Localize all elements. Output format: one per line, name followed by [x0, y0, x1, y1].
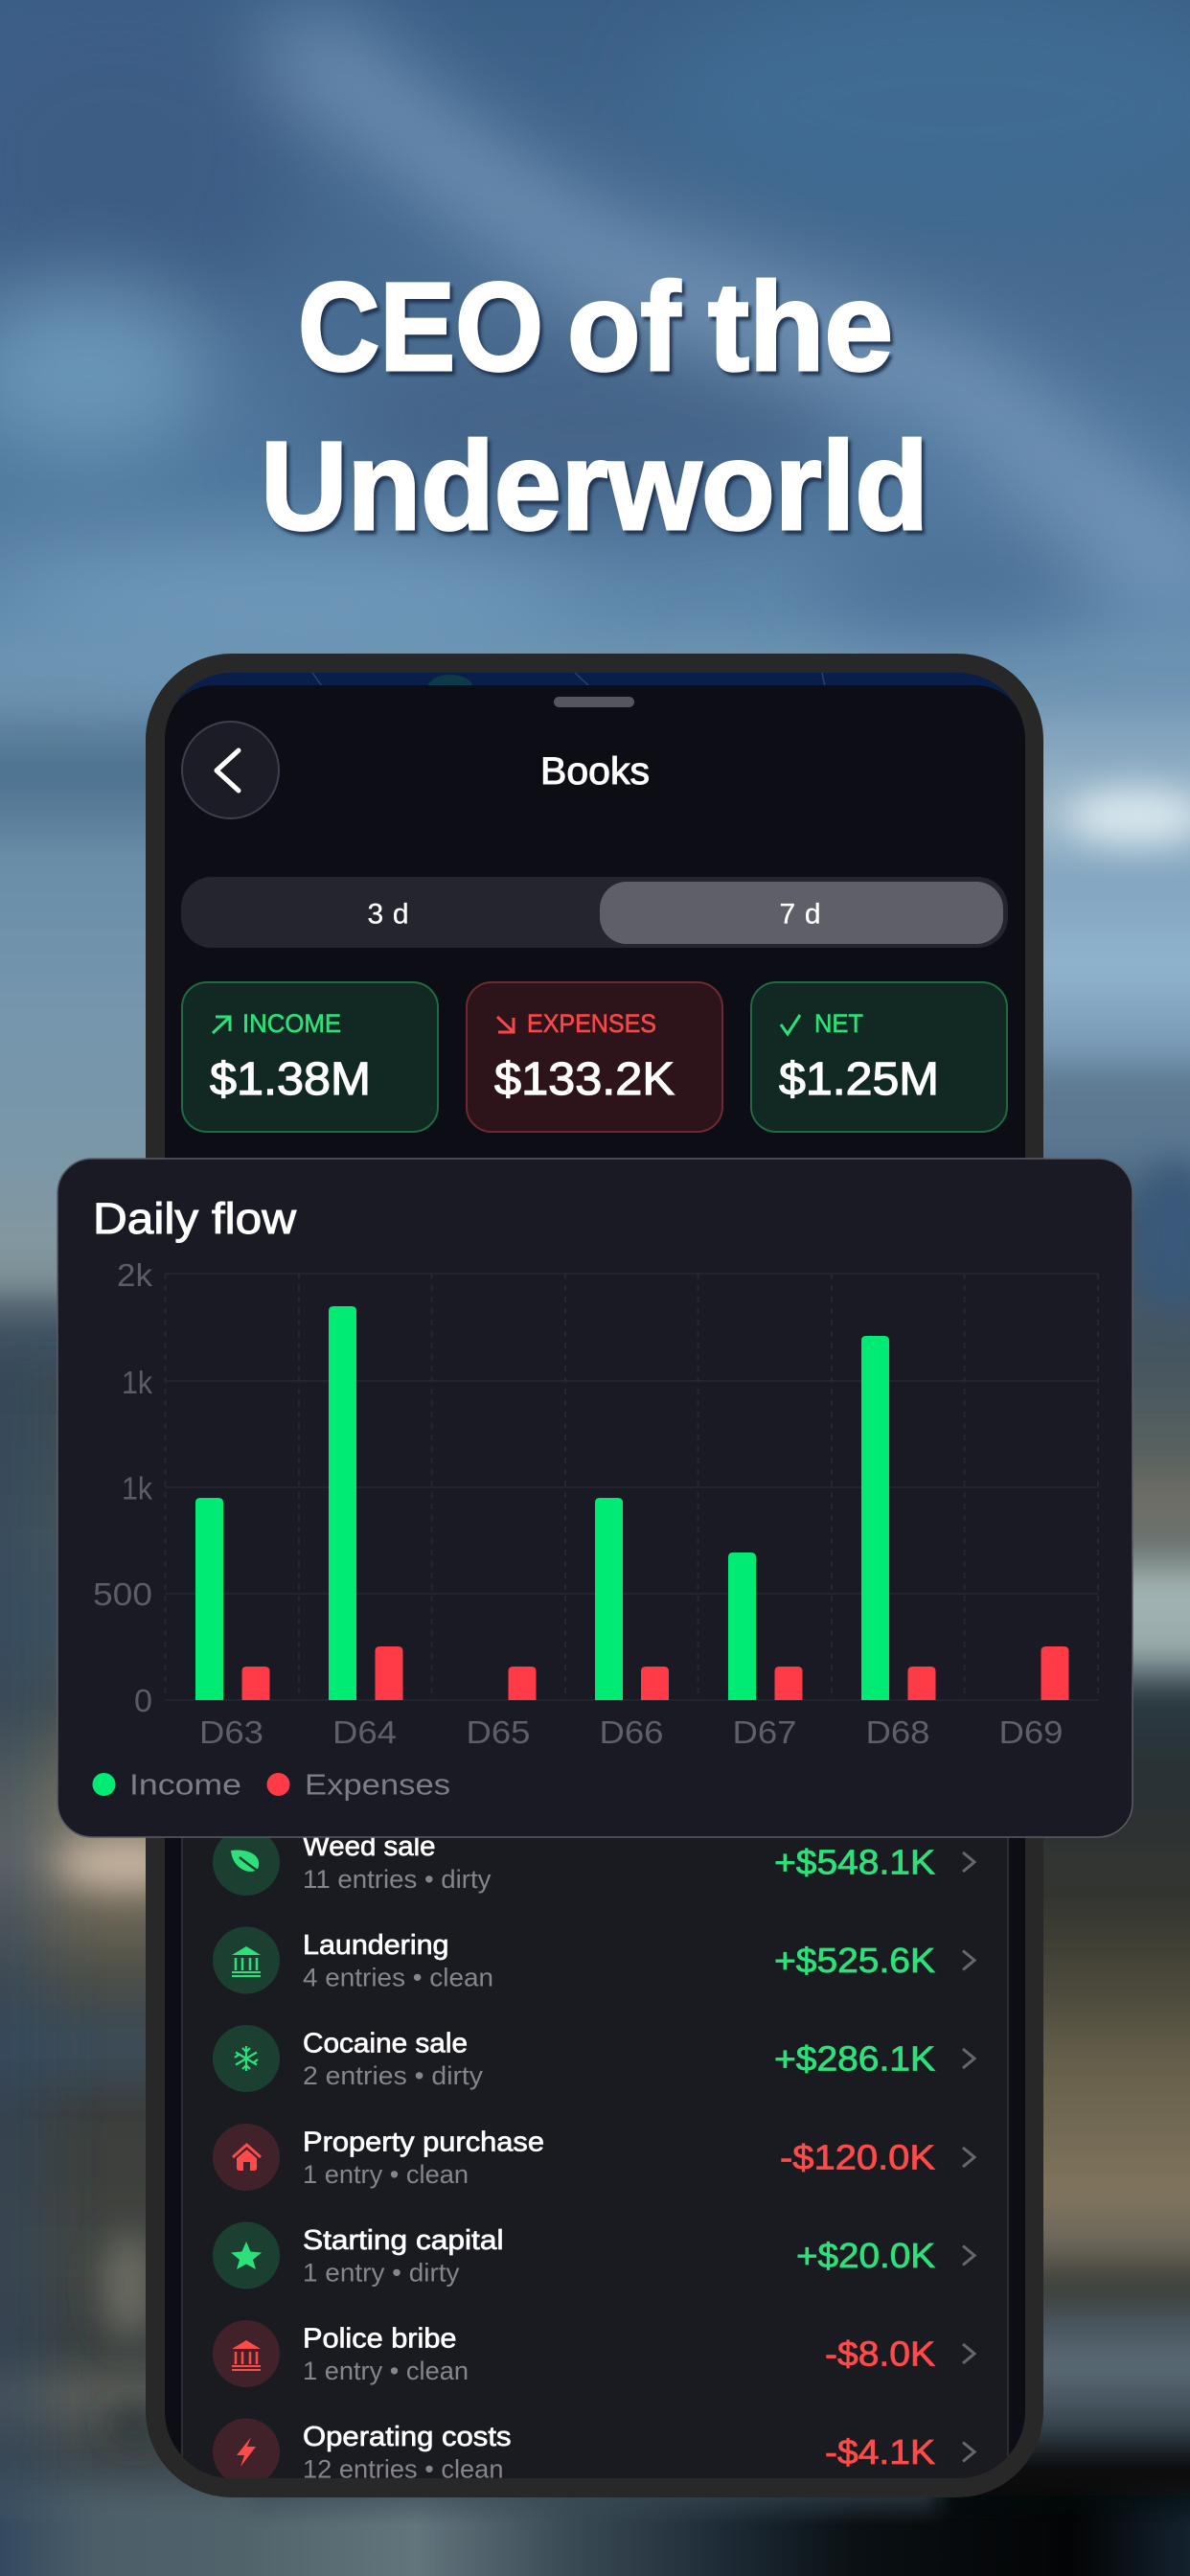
card heading: Daily flow	[93, 1194, 297, 1243]
row: starting capital: +$20.0K	[796, 2236, 935, 2275]
income bars	[195, 1306, 889, 1700]
row: cocaine sale	[213, 2025, 974, 2092]
stat card: income	[182, 982, 438, 1132]
title: of	[567, 256, 680, 397]
stat card: income: $1.38M	[210, 1054, 371, 1105]
row: property purchase: 1 entry • clean	[303, 2160, 469, 2189]
row: weed sale: 11 entries • dirty	[303, 1865, 492, 1894]
range segmented control: 3 d	[368, 899, 408, 930]
row: starting capital: 1 entry • dirty	[303, 2258, 460, 2287]
sheet heading: Books	[540, 750, 650, 793]
phone frame	[146, 654, 1043, 2497]
row: laundering: Laundering	[303, 1930, 448, 1961]
row: cocaine sale: +$286.1K	[774, 2039, 935, 2078]
x axis labels: D66	[600, 1714, 663, 1750]
sheet handle	[554, 697, 634, 707]
row: starting capital	[213, 2221, 974, 2288]
map sliver behind sheet	[165, 673, 1025, 711]
legend: Expenses	[305, 1767, 450, 1802]
x axis labels: D67	[732, 1714, 797, 1750]
row: operating costs: 12 entries • clean	[303, 2455, 504, 2484]
row: weed sale	[213, 1838, 977, 1896]
row: laundering: 4 entries • clean	[303, 1963, 493, 1991]
range segmented control	[181, 877, 1008, 948]
row: laundering: +$525.6K	[774, 1941, 935, 1980]
row: police bribe	[213, 2320, 974, 2387]
y axis labels: 0	[134, 1683, 152, 1718]
panel: daily flow chart card	[57, 1159, 1133, 1837]
title: CEO	[298, 256, 543, 397]
row: weed sale: Weed sale	[303, 1831, 435, 1862]
y axis labels: 500	[93, 1576, 152, 1612]
y axis labels: 2k	[117, 1257, 153, 1293]
row: weed sale: +$548.1K	[774, 1842, 935, 1882]
row: operating costs	[213, 2419, 977, 2478]
row: cocaine sale: Cocaine sale	[303, 2028, 468, 2058]
row: police bribe: Police bribe	[303, 2323, 456, 2354]
title: Underworld	[261, 415, 928, 556]
row: property purchase: Property purchase	[303, 2128, 544, 2158]
x axis labels: D69	[998, 1714, 1064, 1750]
row: property purchase: -$120.0K	[780, 2137, 935, 2177]
stat card: expenses: $133.2K	[494, 1054, 675, 1105]
x axis labels: D65	[466, 1714, 531, 1750]
row: operating costs: Operating costs	[303, 2422, 512, 2452]
phone screen	[165, 673, 1025, 2576]
stat card: net: NET	[814, 1009, 863, 1038]
bottom sheet	[165, 685, 1025, 2506]
row: cocaine sale: 2 entries • dirty	[303, 2061, 484, 2090]
stat card: expenses	[467, 982, 722, 1132]
row: operating costs: -$4.1K	[825, 2432, 935, 2472]
x axis labels: D63	[199, 1714, 263, 1750]
stat card: net: $1.25M	[779, 1054, 939, 1105]
stat card: income: INCOME	[242, 1009, 341, 1038]
row: police bribe: 1 entry • clean	[303, 2357, 469, 2385]
row: laundering	[213, 1926, 974, 1993]
title: the	[708, 256, 893, 397]
row: police bribe: -$8.0K	[825, 2334, 935, 2373]
legend: Income	[129, 1767, 241, 1802]
y axis labels	[93, 1257, 153, 1718]
stat card: net	[751, 982, 1007, 1132]
x axis labels: D64	[332, 1714, 397, 1750]
back button	[182, 722, 279, 818]
expense bars	[241, 1646, 1069, 1700]
stat card: expenses: EXPENSES	[527, 1009, 656, 1038]
x axis labels: D68	[866, 1714, 929, 1750]
row: starting capital: Starting capital	[303, 2225, 504, 2256]
y axis labels: 1k	[122, 1470, 152, 1506]
title	[261, 256, 928, 556]
x axis labels	[199, 1714, 1064, 1750]
row: property purchase	[213, 2124, 974, 2191]
range segmented control: 7 d	[780, 899, 820, 930]
category list panel	[181, 1838, 1009, 2478]
y axis labels: 1k	[122, 1365, 152, 1400]
legend	[92, 1767, 450, 1802]
